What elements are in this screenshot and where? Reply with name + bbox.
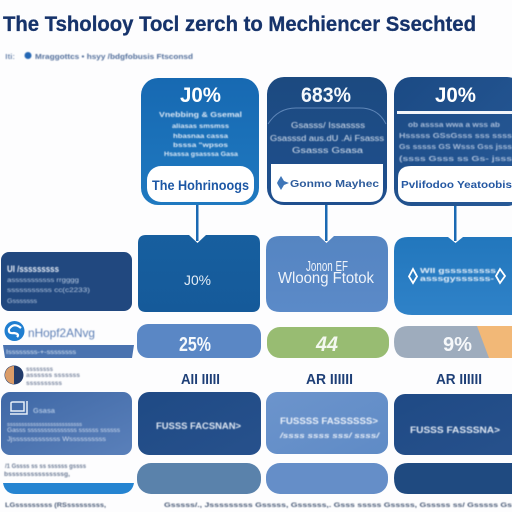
panel: top card 2 bbox=[267, 77, 387, 205]
bar: left bright blue strip bbox=[3, 483, 134, 494]
panel: left info box 1: sssssssssss cc(c2233) bbox=[7, 287, 90, 294]
bar: left blue strip: Issssssss-+-ssssssss bbox=[6, 349, 77, 356]
text block: card 3 description: Gs sssss GS Wsss Gss jsss bbox=[399, 144, 512, 151]
white label: card 3 bbox=[398, 166, 512, 202]
label: column 1: AII IIIII bbox=[181, 371, 220, 388]
panel: left info box 1: UI /sssssssss bbox=[7, 264, 59, 274]
subtitle line with source: Iti: bbox=[5, 54, 15, 61]
panel: second row card 3 bbox=[394, 237, 512, 315]
panel: top card 3: Pvlifodoo Yeatoobis bbox=[401, 179, 512, 191]
panel: left info box 2: Gasss sssssssssssssss ssssss ssssss bbox=[7, 428, 120, 434]
divider bar bbox=[397, 111, 512, 114]
panel: left info box 1: asssssssssss rrgggg bbox=[7, 277, 79, 284]
panel: row 4 card 2 bbox=[266, 392, 388, 454]
text block: card 1 description bbox=[159, 110, 242, 158]
text block: card 2 description: Gsasss/ Issassss bbox=[291, 121, 365, 130]
panel: left info box 1 bbox=[1, 252, 132, 311]
bar: row 3 card 3 bbox=[394, 326, 512, 358]
bar: row 3 card 1 bbox=[137, 324, 261, 358]
text block: card 1 description: bsssa "wpsos bbox=[173, 143, 229, 149]
panel: row 4 card 2: FUSSSS FASSSSSS> bbox=[280, 416, 378, 426]
connector 3 bbox=[454, 206, 456, 241]
text: icon description: ssssssss bbox=[26, 367, 54, 373]
bar: row 5 pill 1 bbox=[137, 463, 261, 494]
bar: row 5 pill 2 bbox=[266, 463, 388, 494]
title: The Tsholooy Tocl zerch to Mechiencer Ssechted bbox=[3, 13, 476, 36]
panel: top card 1 bbox=[141, 78, 259, 205]
text block: card 3 description bbox=[399, 122, 512, 163]
connector 1 bbox=[196, 205, 198, 241]
bar: row 3 card 2: 44 bbox=[315, 333, 338, 356]
text block: card 3 description: ob asssa wwa a wss ab bbox=[408, 122, 500, 129]
icon: diamond left bbox=[409, 269, 417, 283]
panel: top card 3 bbox=[394, 77, 512, 206]
text: icon label: nHopf2ANvg bbox=[28, 326, 95, 340]
heading: card 3 percentage: J0% bbox=[435, 84, 476, 107]
bar: row 3 card 2 bbox=[267, 327, 389, 358]
panel: left info box 2: ssssssssssssssssssssssssss bbox=[7, 422, 83, 428]
text block: card 1 description: aliasas smsmss bbox=[172, 124, 230, 130]
text block: card 2 description bbox=[270, 121, 384, 155]
icon: diamond star bbox=[277, 176, 289, 190]
text block: card 1 description: hbasnaa cassa bbox=[173, 134, 229, 140]
icon: tan and navy circle bbox=[4, 366, 24, 384]
panel: left info box 2: Gsasa bbox=[33, 406, 56, 415]
text: left note bbox=[4, 463, 86, 478]
bar: left blue strip bbox=[3, 345, 134, 358]
panel: second row card 2: Jonon EF bbox=[306, 258, 348, 275]
panel: left info box 2: Jjsssssssssssss Wssssssssss bbox=[7, 437, 106, 443]
text: left note: bsssssssssssssssg, bbox=[4, 471, 70, 478]
panel: left info box 2 bbox=[1, 392, 132, 455]
panel: second row card 1: J0% bbox=[184, 272, 211, 288]
label: column 2: AR IIIIII bbox=[306, 371, 353, 388]
white label: card 2 bbox=[271, 164, 383, 202]
bar: row 3 card 3: 9% bbox=[443, 334, 472, 356]
text block: card 3 description: Hsssss GSsGsss sss ssss bbox=[399, 133, 512, 140]
text block: card 1 description: Hsassa gsasssa Gasa bbox=[164, 151, 238, 158]
subtitle line with source: Mraggottcs • hsyy /bdgfobusis Ftsconsd bbox=[35, 52, 193, 61]
text: footer: Gsssss/., Jsssssssss Gsssss, Gssssss,. Gsss sssss Gsssss, Gsssss ss/ Gsssss Gs bbox=[164, 502, 512, 509]
panel: top card 2: Gonmo Mayhec bbox=[290, 178, 379, 190]
heading: card 1 percentage: J0% bbox=[180, 84, 221, 107]
connector 2 bbox=[325, 205, 328, 241]
text: icon description: ssssssssss bbox=[26, 381, 63, 387]
panel: second row card 3: WII gsssssssss bbox=[420, 266, 496, 275]
panel: second row card 1 bbox=[138, 235, 260, 312]
divider arc bbox=[268, 108, 386, 124]
text block: card 2 description: Gsasss Gsasa bbox=[292, 146, 364, 155]
panel: left info box 1: Gsssssss bbox=[7, 298, 38, 305]
heading: card 2 percentage: 683% bbox=[301, 84, 351, 107]
text: left footer: LGsssssssss (RSsssssssss, bbox=[5, 502, 106, 509]
text: icon description: assssss sssssss bbox=[26, 373, 81, 379]
icon: blue swirl circle bbox=[4, 321, 24, 341]
panel: top card 1: The Hohrinoogs bbox=[152, 178, 249, 193]
panel: row 4 card 1 bbox=[138, 392, 261, 455]
panel: second row card 3: asssgyssssss- bbox=[420, 274, 495, 283]
text block: card 3 description: (ssss Gsss ss Gs- jsss bbox=[399, 156, 512, 163]
icon: diamond right bbox=[496, 269, 505, 283]
panel: row 4 card 3 bbox=[394, 394, 512, 455]
label: column 3: AR IIIIII bbox=[436, 371, 482, 388]
text: left note: /1 Gssss ss ss ssssss gssss bbox=[5, 463, 86, 470]
panel: second row card 2 bbox=[266, 236, 388, 312]
panel: row 4 card 2: /ssss ssss sss/ ssss/ bbox=[279, 433, 380, 440]
panel: row 4 card 1: FUSSS FACSNAN> bbox=[156, 421, 241, 431]
panel: row 4 card 3: FUSSS FASSSNA> bbox=[410, 425, 500, 435]
icon: book bbox=[10, 401, 27, 414]
text: icon description bbox=[26, 367, 81, 387]
text block: card 1 description: Vnebbing & Gsemal bbox=[159, 110, 242, 119]
panel: second row card 2: Wloong Ftotok bbox=[278, 270, 375, 287]
white label: card 1 bbox=[147, 166, 254, 202]
bar: row 5 pill 3 bbox=[394, 463, 512, 494]
text block: card 2 description: Gsasssd aus.dU .Ai Fsasss bbox=[270, 134, 384, 143]
bar: row 3 card 1: 25% bbox=[179, 334, 211, 356]
